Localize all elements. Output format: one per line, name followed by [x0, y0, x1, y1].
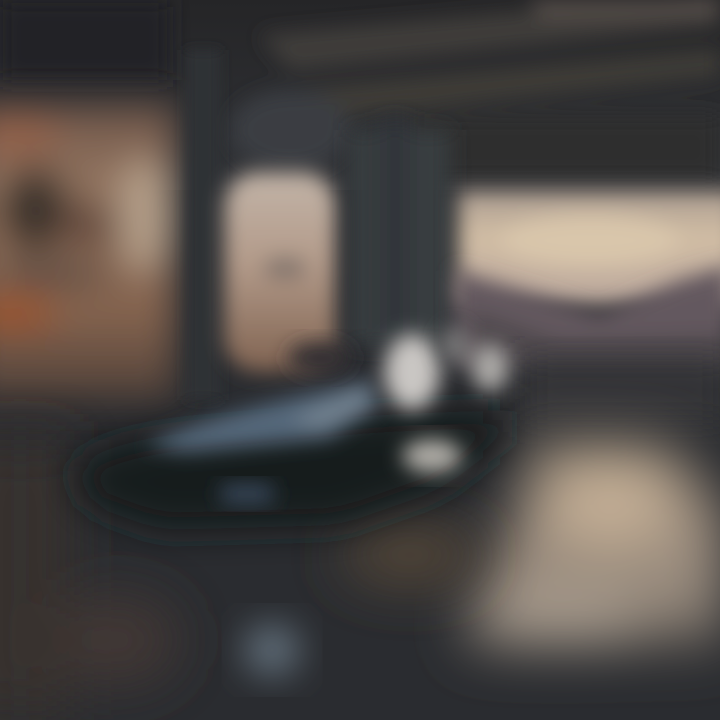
far shoreline — [520, 360, 720, 420]
second pillar — [350, 120, 450, 345]
car grille light — [220, 484, 274, 504]
ceiling with beams — [0, 0, 720, 190]
car — [70, 327, 508, 530]
upper headlight — [384, 334, 440, 410]
car windshield and hood — [145, 380, 380, 452]
car reflection on floor — [244, 624, 300, 676]
floor reflection — [465, 435, 720, 650]
car body — [70, 410, 500, 530]
distant mountains — [455, 265, 720, 370]
far light — [442, 327, 508, 392]
floor shadows and warm reflections — [0, 440, 480, 720]
lower headlight — [402, 439, 462, 473]
left window — [0, 105, 175, 400]
dark cabin roof — [288, 342, 352, 374]
middle window — [224, 172, 336, 372]
distant sky — [458, 190, 720, 305]
first pillar — [186, 50, 220, 400]
